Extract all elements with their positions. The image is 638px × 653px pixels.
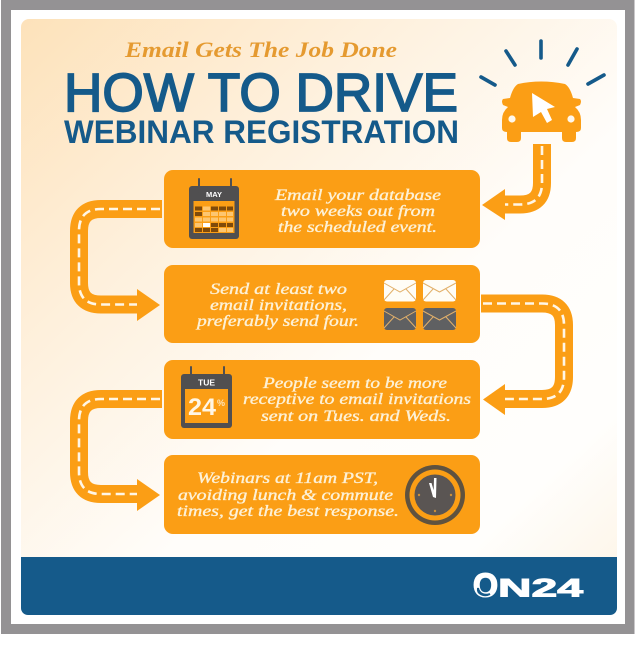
icon: Tuesday calendar: TUE bbox=[198, 378, 215, 388]
icon: four envelopes bbox=[384, 280, 456, 330]
arrow: step 3 to step 4 bbox=[79, 399, 162, 511]
subtitle: Email Gets The Job Done bbox=[124, 37, 397, 62]
title line 2: WEBINAR REGISTRATION bbox=[64, 114, 459, 150]
text: step 1: Email your database bbox=[274, 187, 441, 204]
text: step 2: preferably send four. bbox=[196, 313, 359, 330]
icon: Tuesday calendar bbox=[181, 367, 232, 428]
text: step 2 bbox=[196, 281, 359, 330]
icon: clock bbox=[405, 465, 465, 525]
text: step 4 bbox=[177, 470, 399, 520]
icon: May calendar bbox=[189, 179, 239, 239]
text: step 3: People seem to be more bbox=[262, 375, 447, 392]
icon: May calendar: MAY bbox=[206, 190, 222, 199]
text: step 3: sent on Tues. and Weds. bbox=[261, 408, 451, 425]
text: step 4: Webinars at 11am PST, bbox=[197, 470, 378, 487]
text: step 1 bbox=[274, 187, 441, 236]
ON24 logo: N24 bbox=[498, 574, 583, 602]
icon: Tuesday calendar: % bbox=[217, 398, 225, 408]
panel: step 4 bbox=[164, 455, 480, 534]
text: step 2: Send at least two bbox=[210, 281, 347, 298]
text: step 3 bbox=[243, 375, 471, 425]
title line 1: HOW TO DRIVE bbox=[64, 63, 458, 123]
panel: step 1 bbox=[164, 170, 480, 248]
text: step 1: the scheduled event. bbox=[278, 219, 437, 236]
text: step 3: receptive to email invitations bbox=[243, 391, 471, 408]
icon: car with cursor bbox=[481, 41, 604, 142]
footer bar bbox=[21, 557, 617, 615]
text: step 2: email invitations, bbox=[210, 297, 347, 314]
panel: step 2 bbox=[164, 265, 480, 343]
ON24 logo bbox=[473, 566, 583, 604]
text: step 4: avoiding lunch & commute bbox=[178, 487, 393, 504]
arrow: step 2 to step 3 bbox=[481, 304, 564, 415]
text: step 1: two weeks out from bbox=[281, 203, 435, 220]
icon: Tuesday calendar: 24 bbox=[188, 394, 217, 421]
arrow: car road to step 1 bbox=[482, 144, 542, 220]
ON24 logo: O bbox=[473, 566, 498, 604]
panel: step 3 bbox=[164, 360, 480, 439]
arrow: step 1 to step 2 bbox=[79, 209, 162, 321]
text: step 4: times, get the best response. bbox=[177, 503, 399, 520]
